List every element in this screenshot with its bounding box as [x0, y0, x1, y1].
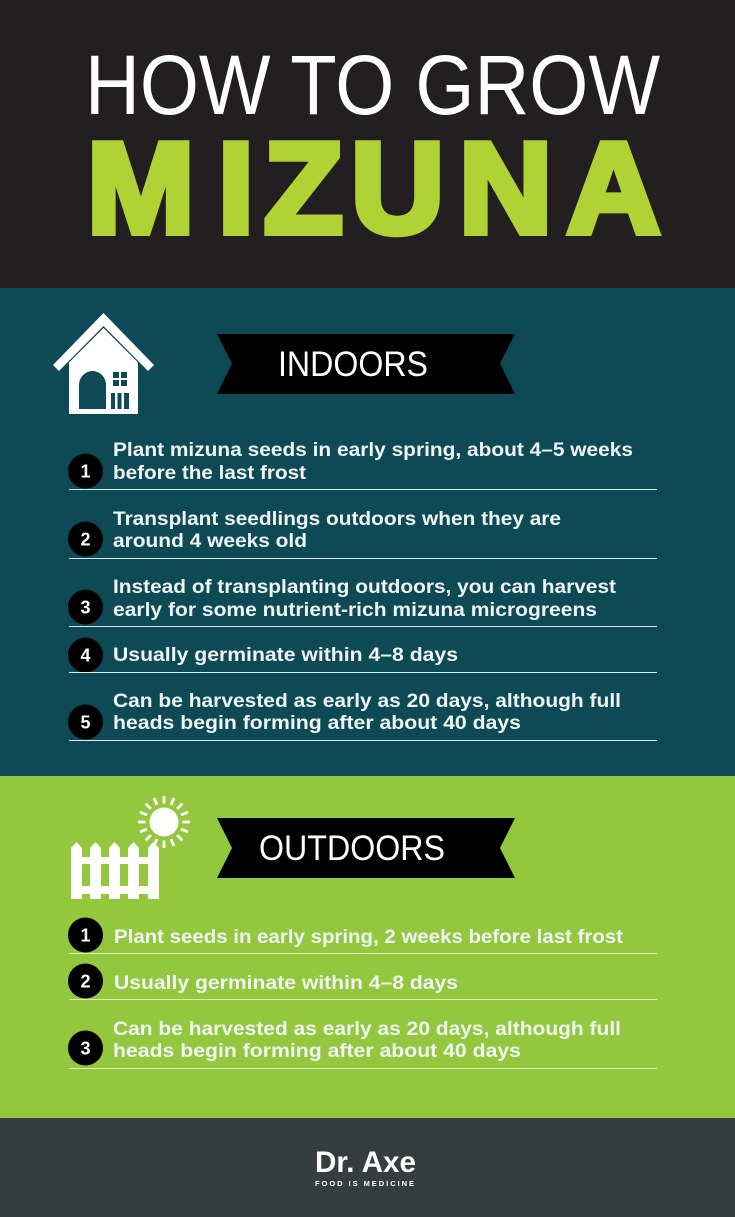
list item 5: 5	[80, 712, 91, 732]
list item 3	[68, 1018, 657, 1069]
list item 3: Instead of transplanting outdoors, you can harvest	[113, 576, 617, 598]
list item 1: 1	[80, 462, 91, 482]
list item 4: Usually germinate within 4–8 days	[113, 644, 458, 666]
panel: indoors	[0, 288, 735, 776]
list item 3: early for some nutrient-rich mizuna microgreens	[113, 599, 597, 621]
heading: how to grow: HOW TO GROW	[85, 38, 660, 132]
list item 4: 4	[80, 646, 91, 666]
list item 3: Can be harvested as early as 20 days, although full	[113, 1018, 621, 1040]
icon: fence and sun	[71, 796, 190, 899]
list item 2: 2	[80, 530, 91, 550]
panel: footer	[0, 1118, 735, 1217]
panel: outdoors	[0, 776, 735, 1118]
logo: Dr. Axe: Dr. Axe	[315, 1146, 416, 1179]
banner: indoors	[217, 334, 515, 394]
panel: title header	[0, 0, 735, 288]
list item 4	[68, 638, 657, 673]
list item 3: heads begin forming after about 40 days	[113, 1040, 521, 1062]
list item 2: around 4 weeks old	[113, 530, 307, 552]
icon: house	[53, 313, 154, 414]
list item 2	[68, 964, 657, 1000]
list item 5	[68, 690, 657, 741]
list item 3: 3	[80, 1038, 91, 1058]
list item 2	[68, 508, 657, 559]
list item 2: Usually germinate within 4–8 days	[114, 972, 458, 994]
list item 1: Plant seeds in early spring, 2 weeks before last frost	[114, 926, 624, 948]
list item 1: Plant mizuna seeds in early spring, about 4–5 weeks	[113, 439, 633, 461]
banner: outdoors	[217, 818, 515, 878]
heading: mizuna: MIZUNA	[87, 116, 660, 260]
banner: indoors: INDOORS	[278, 345, 428, 384]
list item 3	[68, 576, 657, 627]
logo: Dr. Axe: FOOD IS MEDICINE	[315, 1179, 414, 1188]
list item 2: 2	[80, 972, 91, 992]
list item 1	[68, 439, 657, 490]
list item 2: Transplant seedlings outdoors when they are	[113, 508, 561, 530]
banner: outdoors: OUTDOORS	[259, 829, 445, 868]
list item 5: Can be harvested as early as 20 days, although full	[113, 690, 621, 712]
list item 3: 3	[80, 598, 91, 618]
list item 5: heads begin forming after about 40 days	[113, 712, 521, 734]
list item 1: before the last frost	[113, 462, 307, 484]
list item 1: 1	[80, 926, 91, 946]
list item 1	[68, 918, 657, 954]
